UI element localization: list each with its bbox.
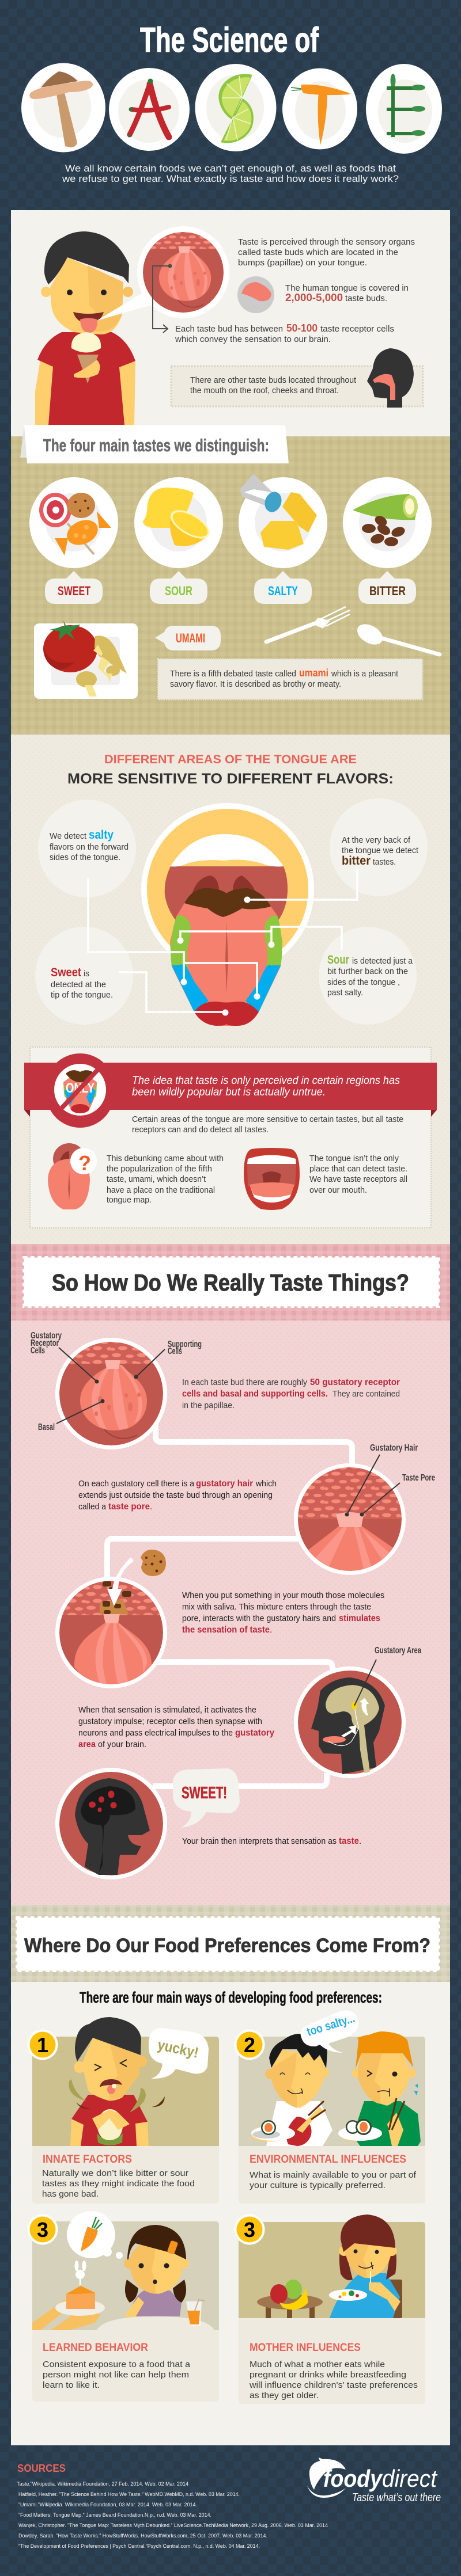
step 3: food molecules diagram [55, 1557, 167, 1688]
step 4 text: gustatory [235, 1728, 274, 1738]
bubble: sweet [35, 927, 133, 1025]
step 2 text: . [150, 1502, 152, 1512]
text: receptor cells: 50-100 [286, 322, 318, 334]
heading band: food preferences [11, 1905, 450, 1982]
header [21, 21, 442, 184]
text: receptor cells: Each taste bud has between [175, 324, 283, 334]
bubble: sour: past salty. [327, 988, 363, 998]
text: receptor cells [175, 322, 394, 344]
illustration: taste bud [137, 226, 229, 318]
heading [67, 753, 394, 787]
caption: LEARNED BEHAVIOR [43, 2342, 148, 2354]
bubble: bitter: At the very back of [342, 835, 411, 845]
caption: learn to like it. [43, 2380, 100, 2390]
footer: foodydirect logo: direct [382, 2465, 438, 2492]
badge 3 [234, 2214, 265, 2245]
callout: umami description: umami [299, 667, 328, 679]
bubble: sweet: detected at the [51, 980, 106, 990]
bubble: sweet: is [84, 969, 89, 979]
text: number of taste buds: The human tongue is covered in [285, 283, 409, 293]
card 1: innate factors [28, 2017, 219, 2204]
bubble: sweet: Sweet [51, 966, 81, 979]
label: salty [254, 571, 312, 604]
callout: other taste buds [171, 366, 423, 406]
icon: spoon [354, 620, 440, 655]
step 2: gustatory hair diagram: Gustatory Hair [370, 1443, 418, 1453]
badge 1: 1 [37, 2033, 48, 2057]
step 1: taste bud diagram: Gustatory [31, 1331, 62, 1341]
icon: open mouth [244, 1148, 300, 1210]
callout: sweet speech bubble: SWEET! [182, 1784, 227, 1802]
text: debunking: taste, umami, which doesn’t [107, 1174, 206, 1184]
footer: sources: SOURCES [17, 2463, 66, 2474]
caption: Naturally we don’t like bitter or sour [42, 2168, 188, 2178]
text: receptor cells: taste receptor cells [320, 324, 394, 334]
callout: speech pointer [97, 292, 153, 321]
caption [250, 2153, 417, 2190]
bubble: sour: bit further back on the [327, 967, 408, 976]
illustration: open mouth and tongue map [141, 803, 314, 1026]
plate: lime letter S [195, 64, 277, 151]
label: bitter [358, 571, 416, 604]
illustration: mother eating [329, 2214, 402, 2318]
icon: cookie [141, 1550, 166, 1576]
step 5 text: taste [339, 1836, 359, 1846]
step 4 text: neurons and pass electrical impulses to the [78, 1728, 233, 1738]
icon: no tongue map [46, 1064, 114, 1128]
badge 1 [28, 2030, 58, 2060]
text: number of taste buds [285, 283, 409, 303]
text: sensory organs: Taste is perceived through the sensory organs [238, 237, 415, 247]
step 3 text [182, 1591, 384, 1635]
text: all receptors: Certain areas of the tongue are more sensitive to certain tastes, but all taste [132, 1114, 403, 1124]
caption: pregnant or drinks while breastfeeding [250, 2370, 406, 2380]
title: The Science of [140, 21, 319, 59]
bubble: bitter: tastes. [373, 857, 396, 867]
caption: Consistent exposure to a food that a [43, 2360, 191, 2369]
plate: carrot letter T [282, 68, 357, 150]
bubble: salty: salty [89, 828, 114, 842]
caption: your culture is typically preferred. [250, 2181, 386, 2190]
intro text: we refuse to get near. What exactly is taste and how does it really work? [62, 173, 399, 184]
caption [43, 2342, 191, 2390]
step 1 text: 50 gustatory receptor [310, 1378, 400, 1387]
footer: sources: Dowdey, Sarah. ”How Taste Works.” HowStuffWorks. HowStuffWorks.com, 25 Oct. 2007. Web. 03 Mar. 2014. [18, 2533, 267, 2539]
step 1: taste bud diagram: Cells [168, 1346, 182, 1356]
illustration: fruit table [257, 2280, 323, 2318]
caption: tastes as they might indicate the food [42, 2179, 195, 2189]
illustration: person finding it salty [338, 2031, 421, 2146]
text: debunking: have a place on the traditional [107, 1185, 215, 1195]
heading: MORE SENSITIVE TO DIFFERENT FLAVORS: [67, 771, 394, 787]
heading band: how do we taste [11, 1244, 450, 1321]
illustration: boy with ice cream [35, 231, 135, 425]
step 3 text: the sensation of taste [182, 1625, 270, 1635]
caption: ENVIRONMENTAL INFLUENCES [250, 2153, 406, 2166]
step 5: brain interprets [55, 1768, 167, 1879]
footer: sources: ”Umami.”Wikipedia. Wikimedia Foundation, 03 Mar. 2014. Web. 03 Mar. 2014. [18, 2502, 197, 2507]
callout: thought bubble with carrot [67, 2211, 123, 2259]
heading: DIFFERENT AREAS OF THE TONGUE ARE [104, 753, 357, 766]
step 2 text: which [255, 1479, 277, 1489]
callout: yucky [149, 2028, 209, 2079]
caption: person might not like can help them [43, 2370, 189, 2380]
footer: sources: ”Food Matters: Tongue Map.” James Beard Foundation.N.p., n.d. Web. 03 Mar. 2014. [18, 2512, 211, 2518]
panel: food preferences [11, 1982, 450, 2445]
arrow: taste bud to receptor cells [153, 264, 172, 333]
illustration: girl and carrot cake [32, 2225, 214, 2330]
bubble: salty [38, 800, 136, 897]
label: bitter: BITTER [369, 584, 406, 598]
callout: umami description [158, 659, 422, 699]
text: taste receptors everywhere: The tongue isn’t the only [309, 1154, 399, 1163]
bubble: sour: Sour [327, 953, 349, 967]
step 1 text [182, 1378, 400, 1410]
bubble: sweet: tip of the tongue. [51, 990, 113, 1000]
label: umami: UMAMI [176, 631, 205, 645]
step 4: gustatory area diagram: Gustatory Area [375, 1646, 421, 1656]
step 4 text: area [78, 1740, 96, 1749]
heading ribbon: The four main tastes we distinguish: [43, 435, 269, 455]
plate: salty [239, 474, 327, 568]
callout: sweet speech bubble [173, 1768, 240, 1828]
connectors: taste locations [88, 869, 357, 1015]
connectors between steps [107, 1422, 352, 1786]
step 4 text: When that sensation is stimulated, it activates the [78, 1705, 256, 1715]
bubble: bitter [330, 798, 428, 896]
plate: sweet [29, 477, 118, 568]
intro text: We all know certain foods we can’t get enough of, as well as foods that [65, 163, 396, 174]
callout: other taste buds: There are other taste buds located throughout [190, 375, 357, 385]
label: salty: SALTY [268, 584, 298, 598]
badge 3: 3 [37, 2218, 48, 2242]
panel: taste process [11, 1321, 450, 1905]
caption [42, 2153, 195, 2199]
card 3: learned behavior [28, 2211, 219, 2402]
step 3 text: . [270, 1625, 272, 1635]
text: number of taste buds: 2,000-5,000 [285, 292, 343, 303]
icon: no tongue map: ONLY [66, 1080, 95, 1096]
icon: small tongue [237, 276, 274, 313]
step 2: gustatory hair diagram: Taste Pore [402, 1473, 435, 1483]
label: sweet [45, 571, 103, 604]
plate: asparagus letter E [366, 64, 442, 154]
banner: The idea that taste is only perceived in certain regions has [132, 1075, 400, 1087]
bubble: sour: sides of the tongue , [327, 977, 400, 987]
footer: sources: Hatfield, Heather. ”The Science Behind How We Taste.” WebMD.WebMD, n.d. Web. 03 Mar. 2014. [18, 2491, 240, 2497]
callout: umami description: There is a fifth debated taste called [170, 669, 296, 679]
callout: other taste buds: the mouth on the roof, cheeks and throat. [190, 386, 339, 395]
bubble: bitter: bitter [342, 854, 371, 867]
label: sour: SOUR [165, 584, 192, 598]
plate: umami [34, 621, 138, 699]
heading band: how do we taste: So How Do We Really Taste Things? [52, 1269, 409, 1296]
banner: been wildly popular but is actually untrue. [132, 1086, 326, 1098]
illustration: disgusted person [69, 2017, 165, 2146]
callout: umami description: which is a pleasant [331, 669, 399, 679]
step 2 text: gustatory hair [196, 1479, 253, 1489]
step 3 text: pore, interacts with the gustatory hairs and [182, 1614, 336, 1623]
step 1: taste bud diagram: Receptor [31, 1338, 59, 1348]
footer: foodydirect logo: foody [323, 2465, 383, 2492]
icon: tongue with question mark: ? [78, 1151, 91, 1175]
card 4: mother influences [234, 2214, 425, 2404]
text: taste receptors everywhere: place that can detect taste. [309, 1164, 407, 1174]
text: taste receptors everywhere [309, 1154, 407, 1195]
step 4 text [78, 1705, 274, 1749]
caption: has gone bad. [42, 2189, 99, 2199]
callout: yucky: yucky! [156, 2036, 200, 2061]
step 1 text: in the papillae. [182, 1401, 235, 1410]
step 2 text: called a [78, 1502, 107, 1512]
step 4 text: of your brain. [98, 1740, 146, 1749]
step 1: taste bud diagram [31, 1331, 202, 1449]
step 4: gustatory area diagram [294, 1646, 421, 1778]
text: debunking [107, 1154, 224, 1205]
heading ribbon [20, 425, 289, 463]
footer: sources [17, 2463, 328, 2549]
step 4 text: gustatory impulse; receptor cells then synapse with [78, 1717, 262, 1726]
bubble: sour: is detected just a [352, 956, 413, 966]
footer: foodydirect logo: Taste what’s out there [352, 2491, 441, 2504]
callout: too salty [301, 2010, 358, 2053]
caption: will influence children's’ taste preferences [249, 2380, 418, 2390]
panel: myth debunked [24, 1047, 437, 1228]
step 5 text: Your brain then interprets that sensation as [182, 1836, 337, 1846]
text: all receptors [132, 1114, 403, 1135]
plate: bitter [343, 477, 432, 568]
caption: INNATE FACTORS [43, 2153, 132, 2166]
caption: What is mainly available to you or part of [250, 2170, 417, 2180]
text: sensory organs: called taste buds which are located in the [238, 248, 398, 257]
text: taste receptors everywhere: over our mouth. [309, 1185, 367, 1195]
text: all receptors: receptors can and do detect all tastes. [132, 1125, 269, 1135]
bubble: salty: sides of the tongue. [50, 853, 120, 862]
footer: sources: Wanjek, Christopher. ”The Tongue Map: Tasteless Myth Debunked.” LiveScience.TechMedia Network, 29 Aug. 2006. Web. 03 Mar. 2014 [18, 2522, 328, 2528]
step 1: taste bud diagram: Cells [31, 1346, 45, 1356]
text: debunking: tongue map. [107, 1195, 152, 1205]
label: umami [155, 626, 221, 650]
illustration: person enjoying sushi [251, 2034, 332, 2146]
step 3 text: mix with saliva. This mixture enters through the taste [182, 1602, 371, 1612]
plate: sour [134, 477, 223, 568]
label: sour [150, 571, 207, 604]
step 1: taste bud diagram: Basal [38, 1422, 55, 1432]
step 1: taste bud diagram: Supporting [168, 1340, 202, 1349]
heading band: food preferences: Where Do Our Food Preferences Come From? [24, 1935, 430, 1957]
icon: fork [266, 607, 350, 642]
plate: mushroom letter T [21, 63, 105, 152]
step 1 text: cells and basal and supporting cells. [182, 1389, 328, 1399]
plate: chili letter A [109, 68, 190, 151]
step 2 text [78, 1479, 277, 1512]
text: sensory organs [238, 237, 415, 268]
icon: tongue with question mark [48, 1143, 97, 1209]
callout: umami description: savory flavor. It is described as brothy or meaty. [170, 679, 341, 689]
step 3 text: When you put something in your mouth those molecules [182, 1591, 384, 1600]
text: sensory organs: bumps (papillae) on your tongue. [238, 258, 367, 268]
step 5 text: . [359, 1836, 361, 1846]
text: debunking: the popularization of the fifth [107, 1164, 212, 1174]
step 2 text: extends just outside the taste bud through an opening [78, 1490, 273, 1500]
icon: head with throat [367, 348, 414, 408]
caption: as they get older. [250, 2391, 319, 2400]
caption [249, 2342, 418, 2400]
panel: four main tastes [11, 425, 450, 735]
badge 3 [28, 2214, 58, 2245]
step 1 text: In each taste bud there are roughly [182, 1378, 307, 1387]
text: taste receptors everywhere: We have taste receptors all [309, 1174, 407, 1184]
bubble: salty: We detect [50, 831, 87, 841]
badge 3: 3 [244, 2218, 255, 2242]
bubble: salty: flavors on the forward [50, 842, 129, 852]
footer: foodydirect logo [307, 2457, 441, 2504]
step 2: gustatory hair diagram [294, 1443, 435, 1575]
text: number of taste buds: taste buds. [345, 294, 387, 303]
footer: sources: Taste.”Wikipedia. Wikimedia Foundation, 27 Feb. 2014. Web. 02 Mar. 2014 [17, 2481, 188, 2487]
intro text [62, 163, 399, 184]
badge 2: 2 [244, 2033, 255, 2057]
step 2 text: On each gustatory cell there is a [78, 1479, 195, 1489]
step 3 text: stimulates [339, 1614, 380, 1623]
badge 2 [234, 2030, 265, 2060]
bubble: bitter: the tongue we detect [342, 846, 419, 855]
banner [24, 1053, 437, 1123]
bubble: sour [319, 927, 417, 1025]
step 1 text: They are contained [332, 1389, 400, 1399]
text: receptor cells: which convey the sensation to our brain. [175, 334, 331, 344]
panel: what is taste [11, 210, 450, 437]
label: sweet: SWEET [58, 584, 90, 598]
step 2 text: taste pore [108, 1502, 150, 1512]
card 2: environmental influences [234, 2010, 425, 2204]
callout: too salty: too salty... [305, 2012, 357, 2039]
text: debunking: This debunking came about with [107, 1154, 224, 1163]
footer: sources: ”The Development of Food Preferences | Psych Central.”Psych Central.com. N.p., n.d. Web. 04 Mar. 2014. [18, 2543, 260, 2549]
caption: MOTHER INFLUENCES [250, 2342, 361, 2354]
caption: Much of what a mother eats while [250, 2360, 385, 2369]
panel: tongue map [11, 735, 450, 1244]
